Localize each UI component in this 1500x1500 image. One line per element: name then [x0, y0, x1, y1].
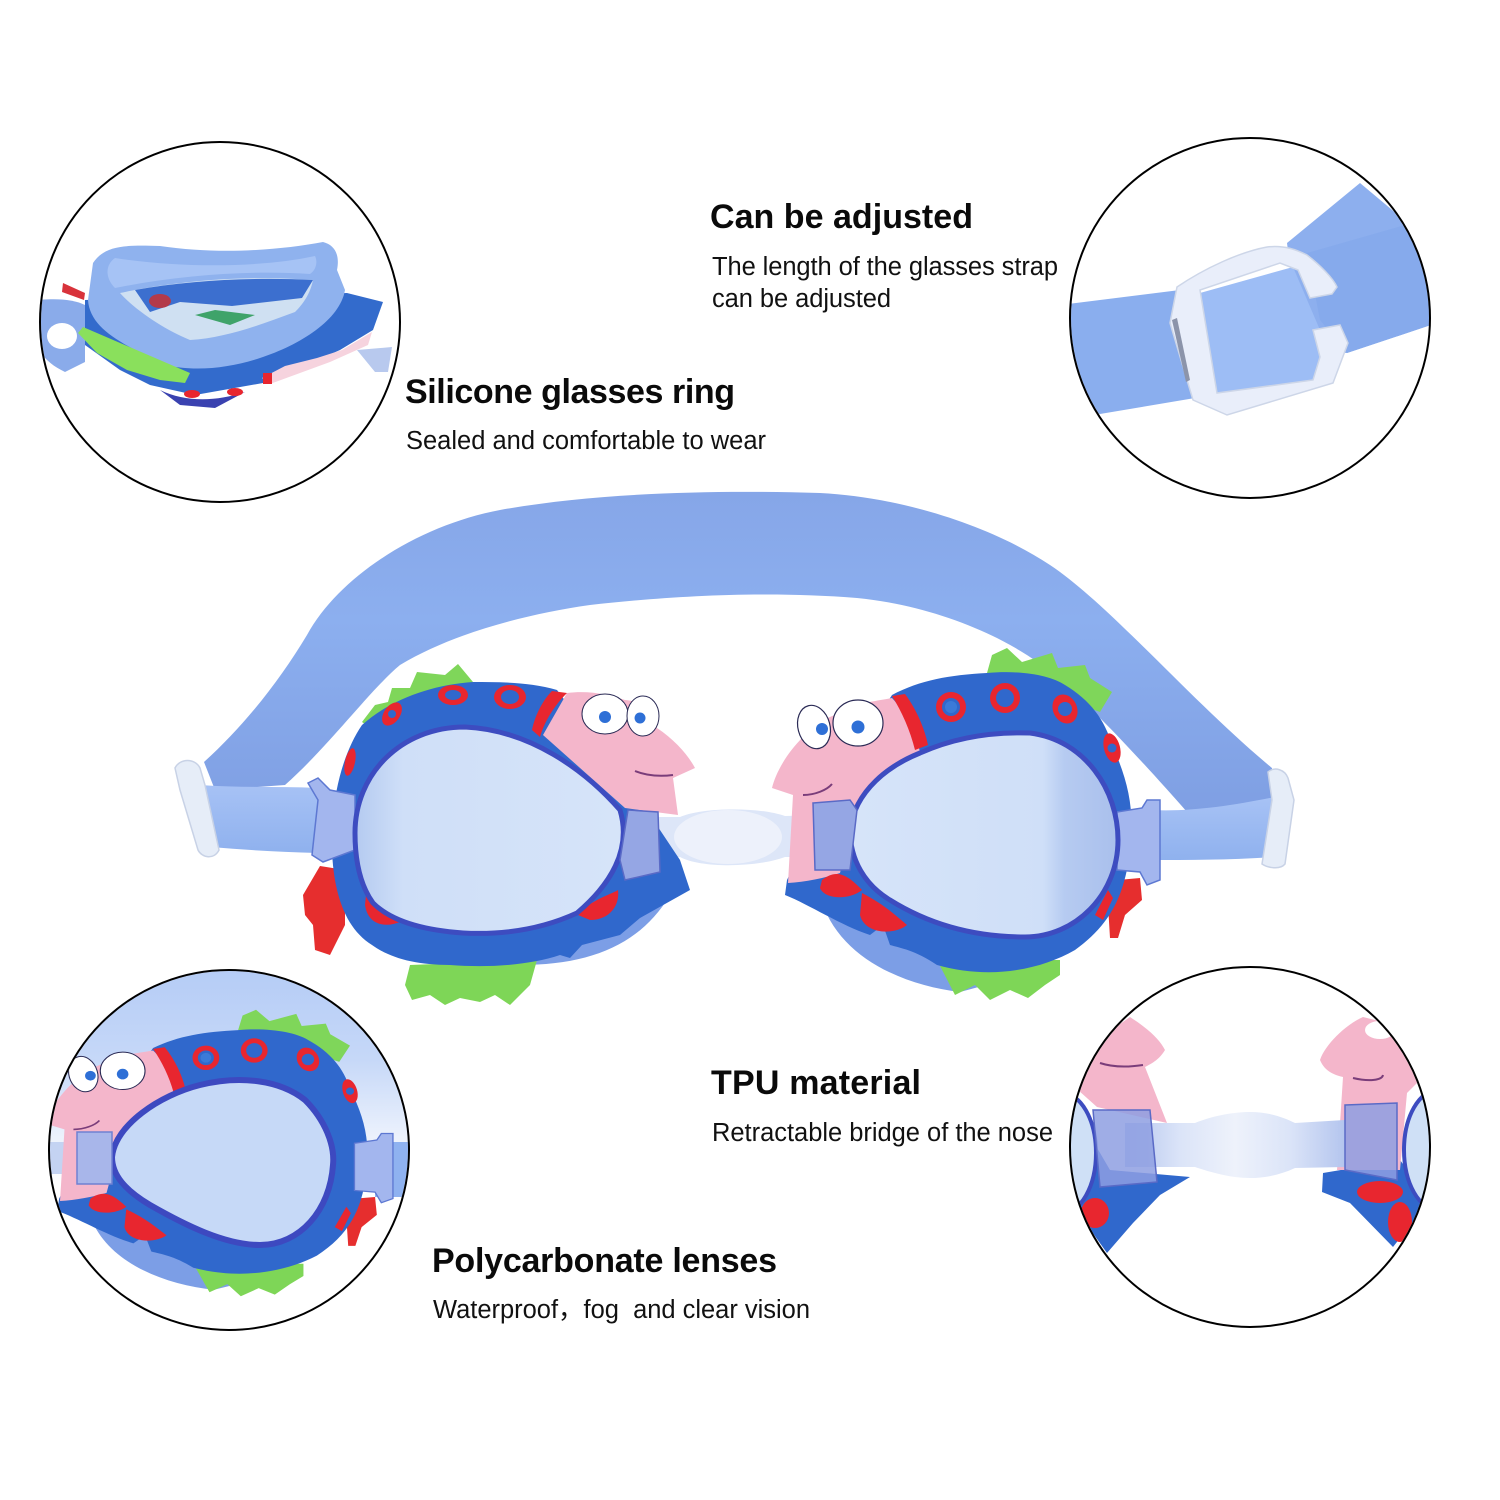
right lens clip [813, 800, 857, 870]
icon: strap loop opening [47, 323, 77, 349]
heading: polycarbonate lenses: Polycarbonate lenses [432, 1242, 777, 1280]
heading: silicone glasses ring: Silicone glasses ring [405, 373, 735, 411]
panel: silicone glasses ring detail circle [38, 142, 400, 502]
icon: clear strap tail [357, 347, 392, 372]
close-up fish eye [46, 1010, 393, 1296]
red fins [1081, 1181, 1412, 1242]
icon: inner green fin [195, 310, 255, 325]
left clear buckle [175, 760, 219, 857]
icon: looped side strap [38, 299, 85, 372]
panel: polycarbonate lens detail circle [46, 970, 409, 1330]
transparent bridge [1125, 1112, 1345, 1178]
icon: right strap band [1287, 183, 1440, 353]
icon: silicone seal ring [88, 242, 345, 369]
icon: red fin tip [62, 283, 85, 300]
right pink head [1320, 1017, 1425, 1170]
right lens edge [1404, 1090, 1472, 1210]
right blue body [1322, 1160, 1430, 1247]
left pink head [1078, 1017, 1167, 1123]
left red stripe [532, 691, 567, 737]
icon: seal highlight [108, 256, 316, 288]
left smile [1100, 1063, 1143, 1067]
text block: tpu material: Retractable bridge of the nose [712, 1119, 1053, 1147]
left smile [635, 771, 673, 776]
left bottom fin [405, 960, 537, 1005]
main goggles illustration [175, 492, 1294, 1005]
icon: buckle shadow [1172, 318, 1190, 382]
icon: green crest [78, 327, 190, 383]
left eye: fish frame and lens [303, 664, 695, 1005]
close-up lens [112, 1080, 333, 1245]
left crest [362, 664, 473, 735]
left pink head [543, 692, 695, 815]
icon: left strap band [1071, 290, 1192, 414]
right smile [1353, 1075, 1383, 1080]
left blue body [1072, 1105, 1190, 1253]
icon: inner fish body seen through lens [135, 279, 313, 312]
left fish eyes [582, 694, 659, 736]
panel: nose bridge detail circle [1069, 966, 1431, 1328]
right lens [850, 733, 1118, 937]
icon: clear plastic buckle [1170, 247, 1348, 415]
icon: inner red fin [149, 294, 171, 308]
head strap [204, 492, 1272, 812]
icon: small ring two [227, 388, 243, 396]
text block: polycarbonate lenses: Waterproof，fog and clear vision [433, 1296, 810, 1324]
right eye: fish frame [772, 648, 1160, 1000]
icon: strap under buckle [1200, 267, 1320, 397]
panel: strap adjuster detail circle [1060, 138, 1440, 498]
left rings [342, 685, 526, 777]
icon: small rings [184, 390, 200, 398]
left connector [308, 778, 355, 862]
text block: can be adjusted: The length of the glasses strap [712, 253, 1058, 281]
icon: goggle body underside [85, 293, 383, 395]
nose bridge [640, 809, 830, 865]
left fin [303, 866, 345, 955]
left body [332, 682, 690, 966]
icon: red stripe [263, 373, 272, 384]
left strap tab [200, 785, 318, 853]
right fish eye [1365, 1021, 1390, 1039]
right strap tab [1150, 797, 1275, 860]
right clear buckle [1262, 769, 1294, 868]
close-up clip [77, 1132, 112, 1184]
heading: can be adjusted: Can be adjusted [710, 198, 973, 236]
icon: pink and white edge [262, 332, 372, 384]
icon: lens window [120, 278, 313, 340]
left skirt [520, 895, 670, 965]
left lens edge [1071, 1098, 1098, 1206]
icon: lens underside [160, 390, 245, 408]
text block: can be adjusted: can be adjusted [712, 285, 891, 313]
side straps [49, 1142, 409, 1197]
text block: silicone glasses ring: Sealed and comfortable to wear [406, 427, 766, 455]
background glow [50, 971, 408, 1142]
icon: strap crease [1347, 226, 1429, 353]
left red fins [365, 890, 618, 925]
bridge clips [1093, 1103, 1397, 1187]
heading: tpu material: TPU material [711, 1064, 921, 1102]
left lens [355, 727, 623, 933]
text block: can be adjusted [712, 253, 1058, 313]
left lens clip [620, 810, 660, 880]
